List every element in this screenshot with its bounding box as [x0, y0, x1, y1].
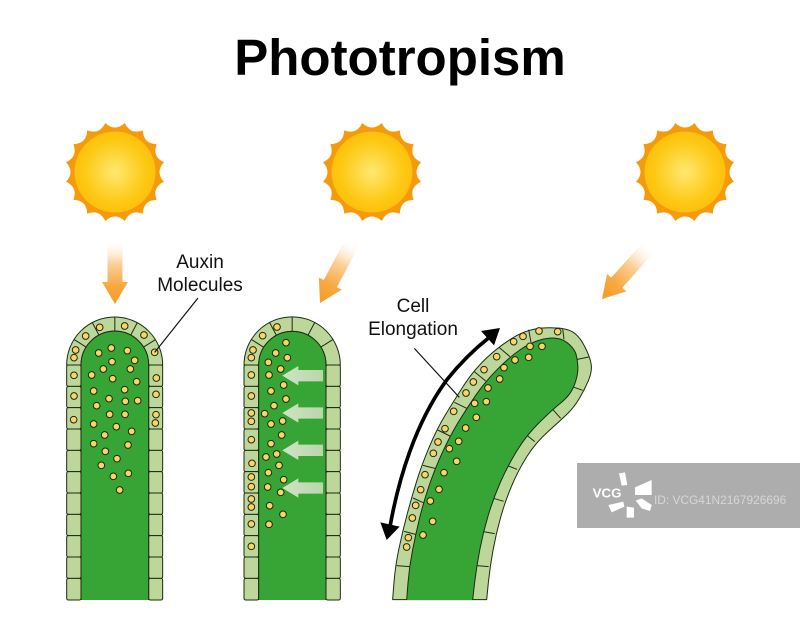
cell walls	[397, 329, 589, 567]
icon: sun 2	[323, 123, 421, 221]
epidermal cells	[67, 317, 163, 600]
inner tissue	[81, 331, 149, 600]
icon: sun 1	[66, 123, 164, 221]
leader line: auxin	[155, 298, 198, 352]
plant: straight shoot with even auxin	[67, 298, 198, 600]
watermark id: ID: VCG41N2167926696	[654, 493, 787, 507]
arrow: light ray 3	[592, 239, 658, 308]
inner tissue	[407, 338, 578, 600]
watermark logo	[593, 472, 652, 518]
epidermal cells	[393, 328, 591, 600]
arrow: light ray 1	[102, 242, 128, 304]
label: auxin molecules: Auxin	[176, 252, 224, 273]
arrows: auxin movement	[282, 366, 323, 498]
plant: shoot bending toward light	[380, 328, 591, 600]
auxin molecules	[403, 328, 561, 550]
epidermal cells	[244, 317, 340, 600]
label: cell elongation: Cell	[397, 296, 429, 317]
icon: sun 3	[636, 123, 734, 221]
watermark logo: VCG	[593, 485, 622, 500]
label: cell elongation: Elongation	[368, 319, 458, 340]
auxin molecules	[248, 324, 291, 550]
auxin molecules	[70, 323, 160, 493]
title: Phototropism	[234, 29, 566, 86]
arrow: light ray 2	[309, 237, 363, 309]
arrow: double-headed elongation	[380, 328, 500, 540]
plant: shoot with auxin moving to shaded side	[244, 317, 340, 600]
leader line: cell elongation	[414, 348, 459, 397]
label: auxin molecules: Molecules	[157, 275, 243, 296]
watermark	[577, 463, 800, 528]
inner tissue	[259, 331, 326, 600]
